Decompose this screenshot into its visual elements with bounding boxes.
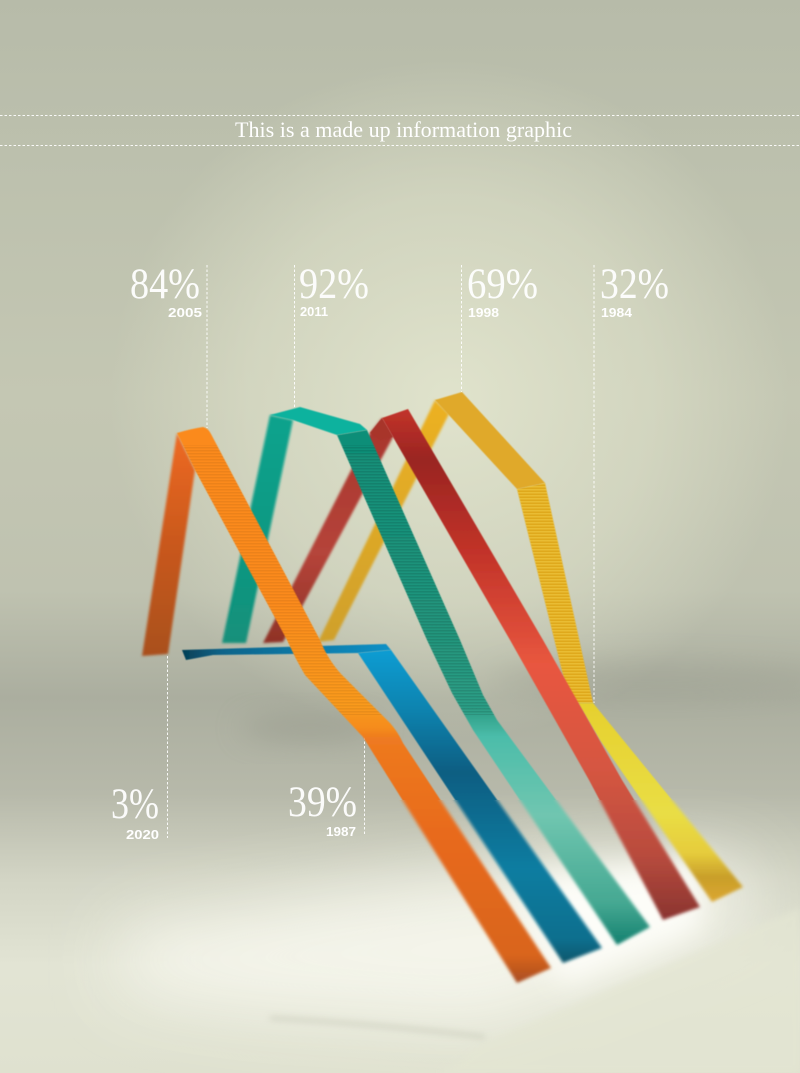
label: 32% 1984: 32% <box>600 261 669 308</box>
ribbon: red 69% 1998 <box>263 409 700 920</box>
leader lines <box>168 265 594 838</box>
label: 84% 2005: 84% <box>130 261 200 308</box>
label: 32% 1984: 1984 <box>601 306 632 320</box>
ribbon: orange 84% 2005 to 3% 2020 <box>142 427 551 983</box>
label: 69% 1998: 1998 <box>468 306 499 320</box>
label: 3% 2020: 3% <box>111 781 159 828</box>
label: 3% 2020: 2020 <box>126 828 159 842</box>
ribbon: blue 39% 1987 <box>182 644 602 963</box>
ribbon: teal 92% 2011 <box>222 407 650 945</box>
label: 92% 2011: 2011 <box>300 305 328 319</box>
label: 92% 2011: 92% <box>299 261 369 308</box>
ribbon: yellow 32% 1984 <box>318 392 743 902</box>
label: 3% 2020 <box>111 781 159 842</box>
label: 69% 1998: 69% <box>467 261 538 308</box>
label: 39% 1987: 1987 <box>326 825 356 839</box>
label: 84% 2005: 2005 <box>168 306 202 320</box>
title rules and title: This is a made up information graphic <box>235 117 572 142</box>
label: 39% 1987: 39% <box>288 779 357 826</box>
